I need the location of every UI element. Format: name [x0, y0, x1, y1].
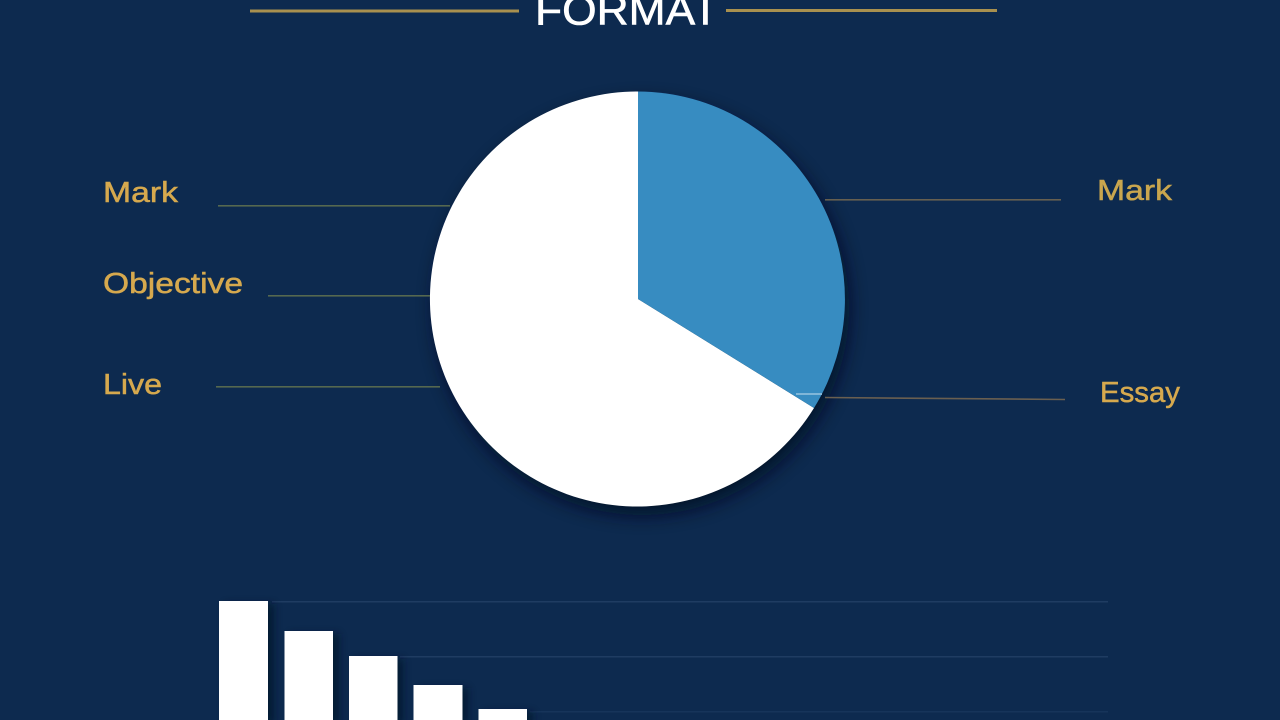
bar 2: [284, 631, 333, 720]
bar shadows: [225, 604, 533, 720]
label: Mark left: Mark: [103, 177, 179, 209]
bar 1: [219, 601, 268, 720]
title: format heading with rules: [250, 0, 997, 34]
label: Objective: Objective: [103, 268, 243, 300]
bar 4: [414, 685, 462, 720]
label: Mark right: Mark: [1097, 175, 1173, 207]
bar chart: [219, 601, 1108, 720]
bar 5: [478, 709, 527, 720]
pie slice: blue: [638, 92, 845, 408]
label: Essay: Essay: [1100, 377, 1180, 409]
bar 3: [349, 656, 398, 720]
pie chart: [430, 91, 849, 515]
label: Live: Live: [103, 369, 162, 401]
pie slice: white majority: [430, 91, 814, 506]
